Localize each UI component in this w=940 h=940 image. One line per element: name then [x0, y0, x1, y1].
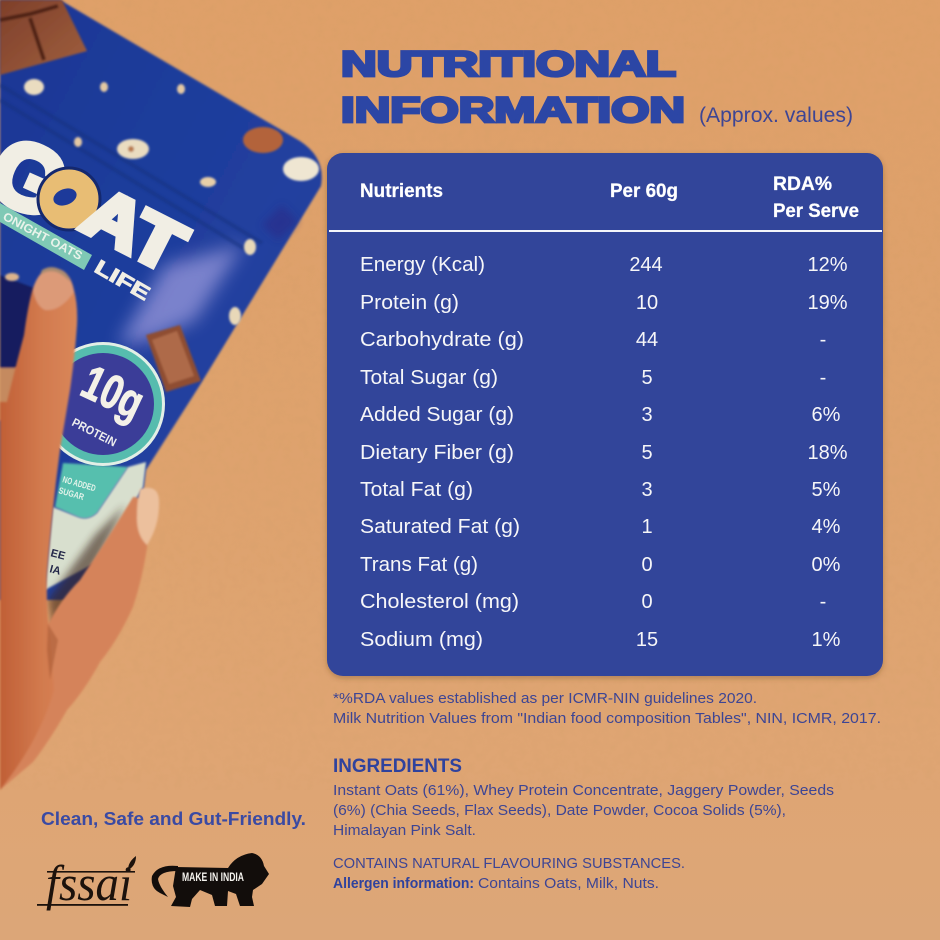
tagline band — [0, 203, 92, 270]
nutrient names: Total Fat (g) — [360, 479, 473, 501]
index finger — [0, 268, 77, 790]
RDA values: 12% — [807, 254, 848, 276]
flavouring and allergen information — [333, 855, 685, 892]
title note: (Approx. values) — [699, 104, 853, 127]
per 60g values: 3 — [641, 404, 653, 426]
nutrient names: Trans Fat (g) — [360, 554, 478, 576]
RDA values — [807, 254, 848, 651]
pouch dark seal patch — [262, 205, 298, 240]
GOAT logo: AT — [71, 172, 197, 288]
protein badge: 10g — [73, 356, 152, 430]
RDA values: - — [820, 367, 826, 389]
GOAT logo: ONIGHT OATS — [1, 209, 85, 263]
nutrient names: Protein (g) — [360, 292, 459, 314]
ingredients heading: INGREDIENTS — [333, 756, 462, 777]
hand — [0, 267, 159, 790]
per 60g values: 5 — [641, 367, 653, 389]
pouch body — [0, 0, 322, 600]
nutrient names: Saturated Fat (g) — [360, 516, 520, 538]
RDA values: 5% — [812, 479, 841, 501]
protein badge: NO ADDED — [61, 474, 97, 493]
protein badge: PROTEIN — [70, 415, 119, 449]
RDA values: 4% — [812, 516, 841, 538]
footnotes: *%RDA values established as per ICMR-NIN guidelines 2020. — [333, 690, 757, 707]
protein badge: SUGAR — [57, 485, 86, 502]
nutrient names: Total Sugar (g) — [360, 367, 498, 389]
protein badge: EE — [49, 547, 67, 563]
nutrient names: Cholesterol (mg) — [360, 591, 519, 613]
RDA values: 18% — [807, 442, 848, 464]
RDA values: - — [820, 329, 826, 351]
logo: make in india lion: MAKE IN INDIA — [182, 870, 244, 884]
per 60g values: 3 — [641, 479, 653, 501]
protein badge — [41, 342, 165, 590]
flavouring and allergen information: CONTAINS NATURAL FLAVOURING SUBSTANCES. — [333, 855, 685, 872]
GOAT logo — [0, 117, 197, 305]
GOAT logo: LIFE — [90, 256, 153, 305]
title — [341, 45, 685, 130]
footnotes: Milk Nutrition Values from "Indian food composition Tables", NIN, ICMR, 2017. — [333, 710, 881, 727]
table header: Nutrients — [360, 181, 443, 202]
per 60g values: 0 — [641, 591, 653, 613]
ingredients list — [333, 782, 834, 839]
oat flakes — [5, 79, 319, 325]
per 60g values — [629, 254, 663, 651]
title: NUTRITIONAL — [341, 45, 676, 84]
table header — [360, 174, 859, 222]
nutrient names: Dietary Fiber (g) — [360, 442, 514, 464]
chocolate top left — [0, 0, 87, 75]
shadow between thumb and finger — [48, 505, 125, 635]
ingredients list: Instant Oats (61%), Whey Protein Concentrate, Jaggery Powder, Seeds — [333, 782, 834, 799]
RDA values: 19% — [807, 292, 848, 314]
pouch seal crease — [0, 85, 262, 252]
per 60g values: 15 — [636, 629, 658, 651]
flavouring and allergen information: Allergen information: — [333, 875, 474, 892]
title: INFORMATION — [341, 91, 685, 130]
per 60g values: 1 — [641, 516, 653, 538]
RDA values: 1% — [812, 629, 841, 651]
per 60g values: 244 — [629, 254, 663, 276]
thumb nail — [137, 488, 159, 545]
tagline: Clean, Safe and Gut-Friendly. — [41, 809, 306, 829]
RDA values: 0% — [812, 554, 841, 576]
table header: RDA% — [773, 174, 832, 195]
per 60g values: 0 — [641, 554, 653, 576]
table header: Per Serve — [773, 201, 859, 222]
nutrient names: Energy (Kcal) — [360, 254, 485, 276]
RDA values: 6% — [812, 404, 841, 426]
ingredients list: (6%) (Chia Seeds, Flax Seeds), Date Powder, Cocoa Solids (5%), — [333, 802, 786, 819]
ingredients list: Himalayan Pink Salt. — [333, 822, 476, 839]
per 60g values: 44 — [636, 329, 658, 351]
nutrient names: Sodium (mg) — [360, 629, 483, 651]
product photo: pouch held by hand — [0, 0, 322, 790]
protein badge: IA — [48, 563, 62, 578]
table header: Per 60g — [610, 181, 678, 202]
nutrient names: Added Sugar (g) — [360, 404, 514, 426]
nutrient names — [360, 254, 524, 651]
pouch sheen — [118, 245, 243, 345]
thumb — [0, 497, 147, 790]
footnotes — [333, 690, 881, 727]
RDA values: - — [820, 591, 826, 613]
nutrient names: Carbohydrate (g) — [360, 329, 524, 351]
panel: nutrition table — [327, 153, 883, 676]
per 60g values: 10 — [636, 292, 658, 314]
per 60g values: 5 — [641, 442, 653, 464]
logo: fssai: fssai — [46, 855, 132, 911]
flavouring and allergen information: Contains Oats, Milk, Nuts. — [478, 875, 659, 892]
chocolate piece — [146, 325, 201, 392]
logo: make in india lion — [152, 853, 269, 907]
